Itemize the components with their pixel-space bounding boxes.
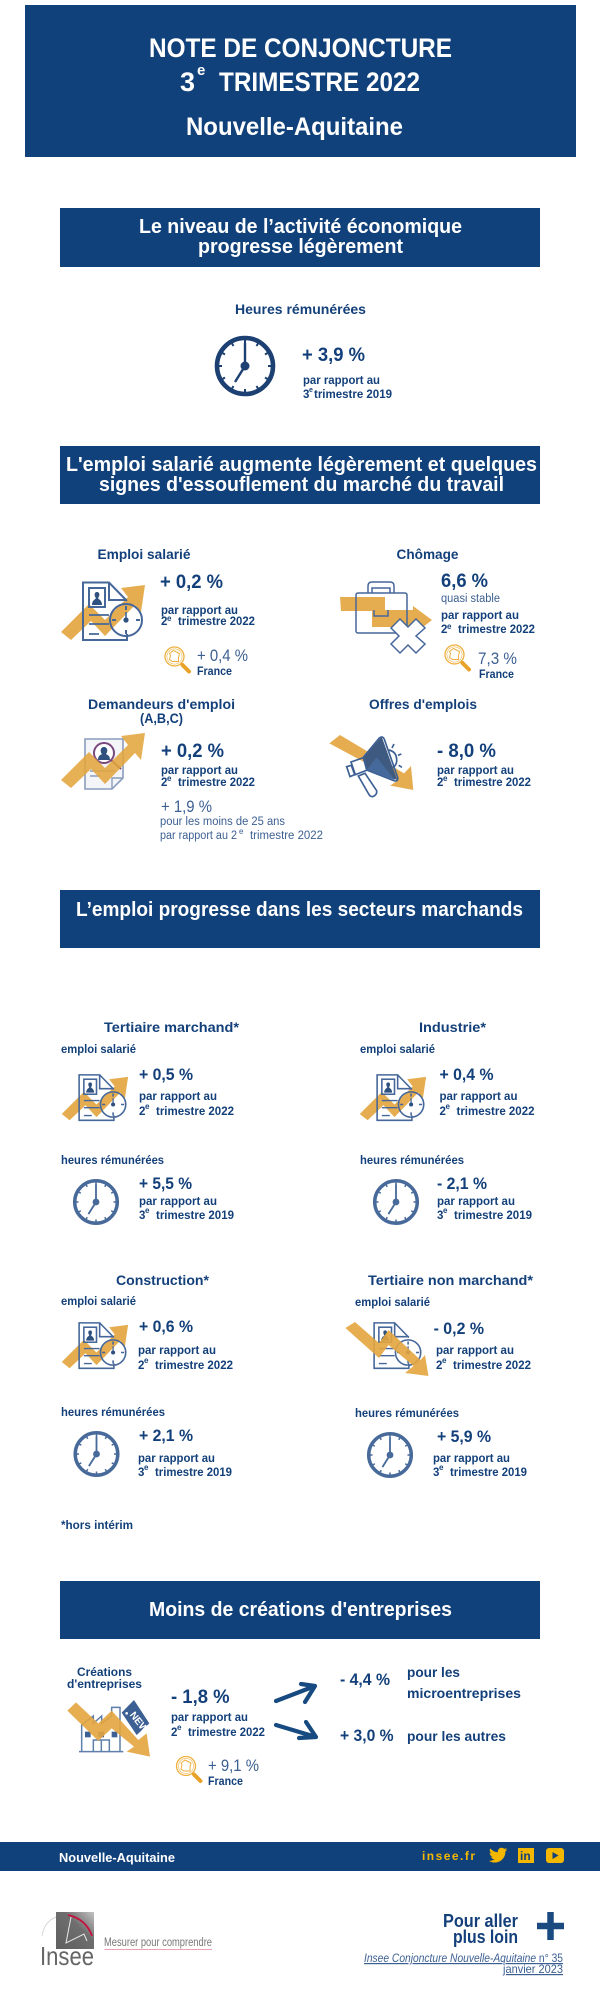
panel: tertiaire marchand: e xyxy=(145,1206,150,1215)
panel: tertiaire non marchand: 2 xyxy=(436,1360,442,1372)
panel: chômage: Chômage xyxy=(396,546,459,562)
panel: tertiaire non marchand: trimestre 2022 xyxy=(453,1360,531,1372)
panel: demandeurs d'emploi: + 0,2 % xyxy=(161,741,224,762)
section heading: créations d'entreprises: Moins de créations d'entreprises xyxy=(149,1599,452,1621)
panel: créations d'entreprises: - 1,8 % xyxy=(171,1687,230,1708)
panel: pour aller plus loin: Pour aller xyxy=(443,1911,518,1931)
panel: emploi salarié: France xyxy=(197,666,232,678)
footnote: *hors intérim xyxy=(61,1520,133,1532)
panel: offres d'emplois: - 8,0 % xyxy=(437,741,496,762)
panel: créations d'entreprises: France xyxy=(208,1776,243,1788)
panel: chômage: 6,6 % xyxy=(441,571,488,592)
panel: tertiaire marchand: heures rémunérées xyxy=(61,1155,164,1167)
panel: tertiaire non marchand: e xyxy=(442,1356,447,1365)
panel: chômage: France xyxy=(479,669,514,681)
header: title banner: e xyxy=(197,62,205,79)
panel: tertiaire non marchand xyxy=(345,1272,534,1479)
icon: document and falling arrow xyxy=(345,1322,428,1376)
panel: chômage: 7,3 % xyxy=(478,649,517,668)
panel: tertiaire non marchand: 3 xyxy=(433,1467,439,1479)
icon: factory, new tag and falling arrow xyxy=(67,1700,150,1757)
header: title banner: TRIMESTRE 2022 xyxy=(219,67,420,97)
logo: Insee: Insee xyxy=(40,1941,94,1971)
panel: demandeurs d'emploi: par rapport au xyxy=(161,765,238,777)
panel: emploi salarié: e xyxy=(167,614,172,623)
panel: tertiaire non marchand: par rapport au xyxy=(436,1345,514,1357)
panel: chômage: trimestre 2022 xyxy=(458,624,535,636)
footer band xyxy=(0,1842,600,1871)
panel: construction: 3 xyxy=(138,1467,144,1479)
panel: heures rémunérées: trimestre 2019 xyxy=(314,389,392,401)
panel: tertiaire marchand: trimestre 2022 xyxy=(156,1106,234,1118)
section heading: activité économique xyxy=(60,208,540,267)
panel: industrie: + 0,4 % xyxy=(440,1065,494,1084)
icon: plus xyxy=(537,1912,564,1940)
panel: industrie: heures rémunérées xyxy=(360,1155,464,1167)
panel: industrie: par rapport au xyxy=(437,1196,515,1208)
panel: demandeurs d'emploi: pour les moins de 25 ans xyxy=(160,816,285,828)
panel: offres d'emplois: e xyxy=(443,774,448,783)
panel: chômage: quasi stable xyxy=(441,593,500,605)
icon: linkedin xyxy=(518,1848,534,1863)
panel: créations d'entreprises: trimestre 2022 xyxy=(188,1727,265,1739)
panel: demandeurs d'emploi: e xyxy=(167,774,172,783)
icon: document and rising arrow xyxy=(62,1075,128,1120)
panel: chômage: e xyxy=(447,622,452,631)
panel: offres d'emplois: par rapport au xyxy=(437,765,514,777)
panel: industrie: trimestre 2022 xyxy=(456,1106,534,1118)
panel: créations d'entreprises: pour les xyxy=(407,1664,460,1680)
panel: industrie: 2 xyxy=(440,1106,446,1118)
panel: construction: par rapport au xyxy=(138,1345,216,1357)
panel: heures rémunérées: + 3,9 % xyxy=(302,345,365,366)
panel: tertiaire non marchand: + 5,9 % xyxy=(437,1427,491,1446)
panel: tertiaire non marchand: heures rémunérées xyxy=(355,1408,459,1420)
header: title banner: 3 xyxy=(180,67,195,97)
panel: demandeurs d'emploi xyxy=(61,696,323,842)
panel: emploi salarié: + 0,4 % xyxy=(197,646,248,665)
panel: créations d'entreprises: e xyxy=(177,1723,182,1732)
panel: emploi salarié: + 0,2 % xyxy=(160,572,223,593)
panel: offres d'emplois: trimestre 2022 xyxy=(454,777,531,789)
section heading: activité économique: progresse légèrement xyxy=(198,236,403,258)
panel: demandeurs d'emploi: (A,B,C) xyxy=(140,710,183,726)
panel: construction: trimestre 2022 xyxy=(155,1360,233,1372)
section heading: secteurs marchands xyxy=(60,890,540,948)
panel: offres d'emplois: Offres d'emplois xyxy=(369,696,477,712)
panel: pour aller plus loin: janvier 2023 xyxy=(502,1962,563,1976)
panel: demandeurs d'emploi: trimestre 2022 xyxy=(250,830,323,842)
panel: construction: + 0,6 % xyxy=(139,1317,193,1336)
panel: industrie: par rapport au xyxy=(440,1091,518,1103)
panel: créations d'entreprises: + 3,0 % xyxy=(340,1726,394,1745)
panel: tertiaire non marchand: Tertiaire non marchand* xyxy=(368,1272,534,1288)
panel: construction: Construction* xyxy=(116,1272,210,1288)
panel: demandeurs d'emploi: par rapport au 2 xyxy=(160,830,237,842)
panel: construction: 2 xyxy=(138,1360,144,1372)
panel: industrie: e xyxy=(443,1206,448,1215)
icon: clock xyxy=(369,1434,411,1476)
panel: tertiaire marchand: par rapport au xyxy=(139,1196,217,1208)
panel: heures rémunérées: Heures rémunérées xyxy=(235,301,366,317)
panel: emploi salarié: par rapport au xyxy=(161,605,238,617)
panel: pour aller plus loin: plus loin xyxy=(453,1927,518,1947)
icon: CV with magnifier and rising arrow xyxy=(61,733,145,789)
panel: construction xyxy=(61,1272,233,1479)
section heading: emploi salarié xyxy=(60,446,540,504)
panel: pour aller plus loin xyxy=(364,1911,564,1976)
panel: créations d'entreprises: 2 xyxy=(171,1727,177,1739)
panel: construction: e xyxy=(144,1356,149,1365)
panel: tertiaire marchand xyxy=(61,1019,240,1223)
panel: tertiaire marchand: 3 xyxy=(139,1210,145,1222)
panel: chômage xyxy=(340,546,535,681)
panel: tertiaire non marchand: emploi salarié xyxy=(355,1297,430,1309)
icon: factory, new tag and falling arrow: NEW xyxy=(127,1710,150,1736)
panel: chômage: par rapport au xyxy=(441,610,519,622)
panel: industrie: Industrie* xyxy=(419,1019,487,1035)
panel: construction: e xyxy=(144,1463,149,1472)
panel: tertiaire marchand: Tertiaire marchand* xyxy=(104,1019,240,1035)
panel: créations d'entreprises: + 9,1 % xyxy=(208,1756,259,1775)
logo: Insee xyxy=(40,1912,212,1971)
panel: tertiaire non marchand: trimestre 2019 xyxy=(450,1467,527,1479)
icon: clock xyxy=(75,1181,117,1223)
panel: tertiaire marchand: par rapport au xyxy=(139,1091,217,1103)
icon: clock xyxy=(75,1433,118,1475)
icon: magnifier France xyxy=(445,645,469,670)
icon: document and rising arrow xyxy=(360,1075,426,1120)
icon: youtube xyxy=(546,1848,564,1863)
panel: heures rémunérées: 3 xyxy=(303,389,309,401)
panel: construction: + 2,1 % xyxy=(139,1426,193,1445)
panel: industrie: - 2,1 % xyxy=(437,1174,487,1193)
panel: heures rémunérées: e xyxy=(309,387,313,394)
panel: créations d'entreprises xyxy=(67,1664,521,1788)
panel: emploi salarié xyxy=(61,546,255,678)
panel: demandeurs d'emploi: e xyxy=(239,827,244,836)
panel: emploi salarié: Emploi salarié xyxy=(98,546,191,562)
footer band: insee.fr xyxy=(422,1849,475,1863)
icon: megaphone and falling arrow xyxy=(329,735,413,797)
section heading: secteurs marchands: L’emploi progresse dans les secteurs marchands xyxy=(76,899,523,921)
panel: créations d'entreprises: microentreprises xyxy=(407,1685,521,1701)
panel: demandeurs d'emploi: trimestre 2022 xyxy=(178,777,255,789)
panel: créations d'entreprises: pour les autres xyxy=(407,1728,506,1744)
panel: construction: par rapport au xyxy=(138,1453,215,1465)
arrow: to autres xyxy=(276,1722,316,1738)
header: title banner: NOTE DE CONJONCTURE xyxy=(149,33,452,63)
icon: magnifier France xyxy=(165,647,189,672)
icon: twitter xyxy=(489,1848,507,1863)
panel: créations d'entreprises: par rapport au xyxy=(171,1712,248,1724)
panel: tertiaire non marchand: par rapport au xyxy=(433,1453,510,1465)
icon: clock xyxy=(217,338,273,394)
panel: construction: heures rémunérées xyxy=(61,1407,165,1419)
panel: tertiaire marchand: 2 xyxy=(139,1106,145,1118)
panel: créations d'entreprises: - 4,4 % xyxy=(340,1670,390,1689)
panel: demandeurs d'emploi: + 1,9 % xyxy=(161,797,212,816)
panel: industrie: e xyxy=(446,1102,450,1111)
section heading: activité économique: Le niveau de l’activité économique xyxy=(139,216,462,238)
panel: industrie: emploi salarié xyxy=(360,1044,435,1056)
panel: demandeurs d'emploi: 2 xyxy=(161,777,167,789)
panel: offres d'emplois: 2 xyxy=(437,777,443,789)
panel: industrie: 3 xyxy=(437,1210,443,1222)
panel: heures rémunérées: par rapport au xyxy=(303,375,380,387)
panel: emploi salarié: 2 xyxy=(161,616,167,628)
panel: tertiaire non marchand: e xyxy=(439,1463,444,1472)
footer band: Nouvelle-Aquitaine xyxy=(59,1850,175,1865)
panel: industrie xyxy=(360,1019,534,1223)
panel: créations d'entreprises: d'entreprises xyxy=(67,1677,142,1691)
section heading: créations d'entreprises xyxy=(60,1581,540,1639)
section heading: emploi salarié: signes d'essouflement du marché du travail xyxy=(99,474,504,496)
logo: Insee: Mesurer pour comprendre xyxy=(104,1937,212,1949)
panel: créations d'entreprises: Créations xyxy=(77,1665,132,1679)
arrow: to microentreprises xyxy=(276,1684,315,1702)
panel: chômage: 2 xyxy=(441,624,447,636)
panel: tertiaire non marchand: - 0,2 % xyxy=(434,1319,484,1338)
panel: industrie: trimestre 2019 xyxy=(454,1210,532,1222)
section heading: emploi salarié: L'emploi salarié augmente légèrement et quelques xyxy=(66,454,537,476)
panel: emploi salarié: trimestre 2022 xyxy=(178,616,255,628)
panel: tertiaire marchand: emploi salarié xyxy=(61,1044,136,1056)
panel: tertiaire marchand: trimestre 2019 xyxy=(156,1210,234,1222)
panel: tertiaire marchand: e xyxy=(145,1102,150,1111)
header: title banner: Nouvelle-Aquitaine xyxy=(186,113,403,141)
header: title banner xyxy=(25,5,576,157)
panel: construction: emploi salarié xyxy=(61,1296,136,1308)
icon: linkedin: in xyxy=(520,1849,531,1863)
panel: offres d'emplois xyxy=(329,696,531,797)
panel: tertiaire marchand: + 5,5 % xyxy=(139,1174,192,1193)
panel: tertiaire marchand: + 0,5 % xyxy=(139,1065,193,1084)
icon: document and rising arrow xyxy=(61,582,145,640)
panel: pour aller plus loin: Insee Conjoncture Nouvelle-Aquitaine n° 35 xyxy=(364,1951,563,1965)
panel: construction: trimestre 2019 xyxy=(155,1467,232,1479)
panel: heures rémunérées xyxy=(217,301,392,401)
panel: demandeurs d'emploi: Demandeurs d'emploi xyxy=(88,696,235,712)
icon: briefcase, arrow and cross xyxy=(340,582,432,653)
icon: magnifier France xyxy=(176,1756,200,1781)
icon: document and rising arrow xyxy=(62,1323,128,1368)
icon: clock xyxy=(375,1181,417,1223)
